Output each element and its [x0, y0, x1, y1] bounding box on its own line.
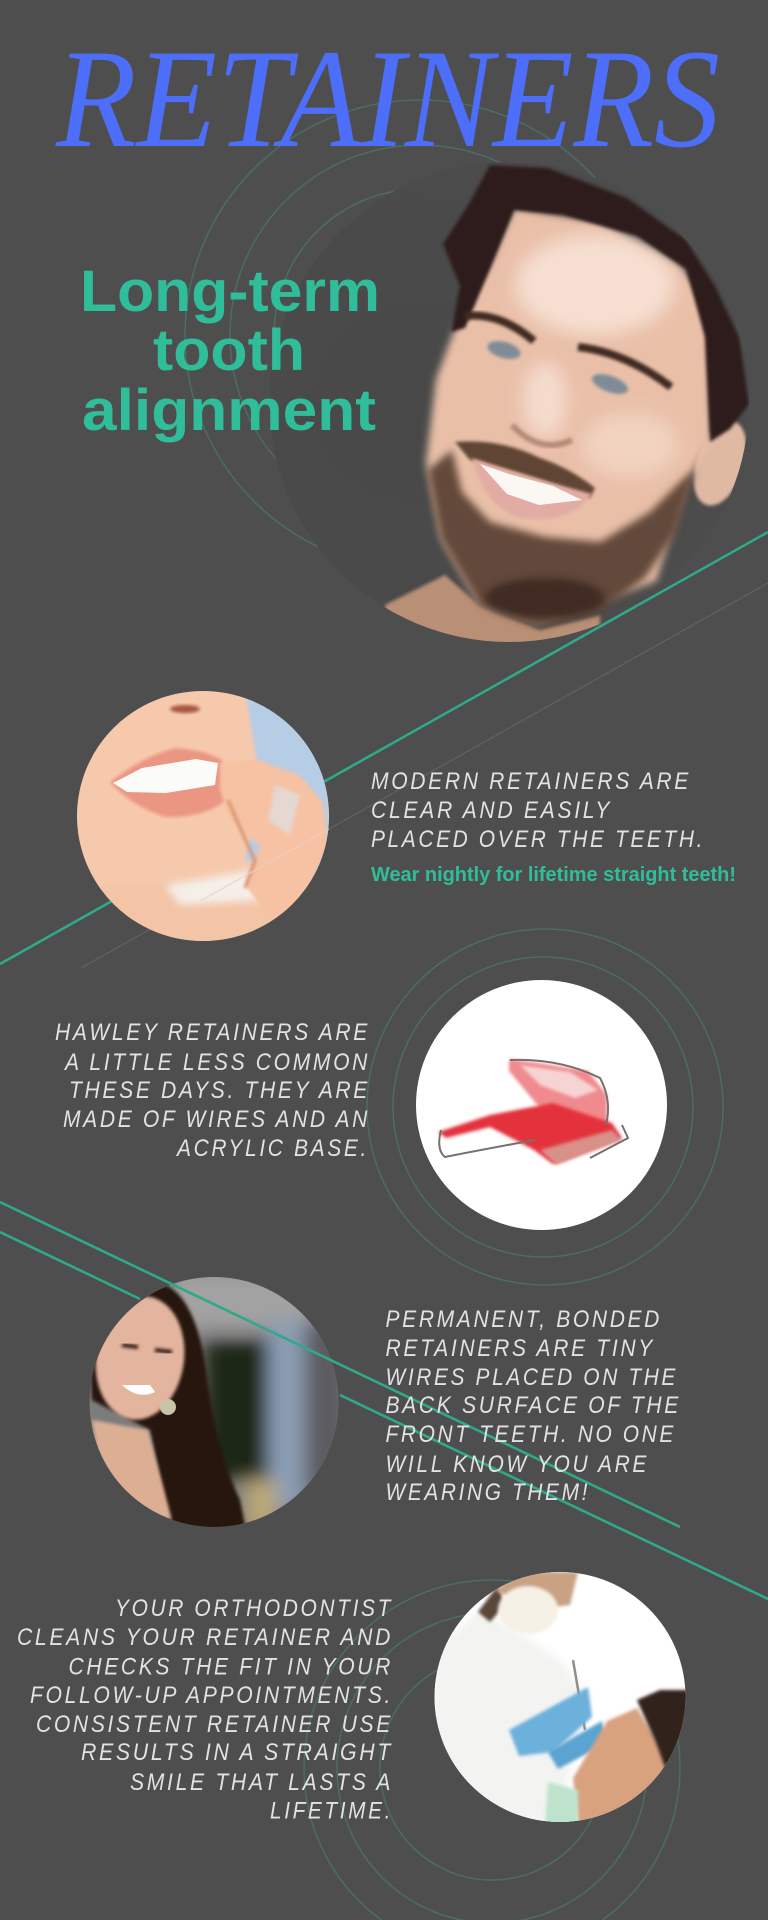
title: RETAINERS: [55, 21, 720, 177]
heading: long-term tooth alignment: tooth: [153, 318, 305, 383]
doctor head: [495, 1572, 578, 1610]
text: permanent retainers: [386, 1306, 681, 1506]
eyebrows: [465, 316, 534, 341]
hair: [443, 165, 749, 442]
cheek highlight: [582, 413, 678, 477]
text: modern retainers: CLEAR AND EASILY: [371, 797, 612, 824]
text: modern retainers: [371, 768, 736, 886]
neck: [98, 886, 274, 941]
text: your orthodontist: LIFETIME.: [270, 1798, 393, 1824]
wires: [439, 1060, 628, 1158]
nose shadow: [512, 425, 572, 445]
forehead highlight: [515, 235, 675, 335]
photo: smiling woman: [88, 1270, 345, 1530]
chest: [92, 1420, 172, 1520]
eyes: [486, 338, 522, 362]
neck and collar: [383, 574, 602, 642]
green cloth: [545, 1782, 578, 1825]
text: permanent retainers: WIRES PLACED ON THE: [386, 1364, 678, 1391]
text: hawley retainers: ACRYLIC BASE.: [175, 1135, 369, 1162]
text: permanent retainers: WEARING THEM!: [386, 1479, 590, 1506]
ear: [692, 420, 746, 508]
heading: long-term tooth alignment: [80, 259, 380, 443]
diagonal line: lower teal three: [0, 1202, 680, 1527]
palate highlight: [520, 1065, 598, 1098]
instrument: [573, 1660, 585, 1730]
heading: long-term tooth alignment: Long-term: [80, 259, 380, 324]
lip: [472, 458, 592, 519]
lips: [110, 748, 226, 817]
text: permanent retainers: FRONT TEETH. NO ONE: [386, 1421, 676, 1448]
diagonal line: lower teal two: [340, 1395, 768, 1599]
text: hawley retainers: HAWLEY RETAINERS ARE: [55, 1019, 370, 1046]
collar: [165, 868, 268, 905]
red base: [438, 1103, 622, 1164]
doctor coat: [434, 1610, 590, 1822]
moustache: [455, 441, 595, 498]
glove two: [548, 1721, 607, 1769]
teeth: [480, 464, 582, 505]
text: permanent retainers: PERMANENT, BONDED: [386, 1306, 662, 1333]
photo: clear aligner on teeth: [77, 691, 329, 941]
text: your orthodontist: YOUR ORTHODONTIST: [115, 1595, 393, 1622]
concentric rings: top: [185, 100, 655, 570]
photo: hawley retainer: [416, 980, 667, 1230]
text: hawley retainers: [55, 1019, 370, 1162]
blurred background: [170, 1270, 345, 1530]
concentric rings: retainer: [367, 929, 723, 1285]
text: hawley retainers: THESE DAYS. THEY ARE: [69, 1077, 370, 1104]
eyes: [122, 1345, 172, 1352]
diagonal line: upper faint: [81, 583, 768, 968]
text: your orthodontist: FOLLOW-UP APPOINTMENTS.: [30, 1682, 393, 1709]
concentric rings: bottom: [304, 1580, 680, 1920]
text: modern retainers: PLACED OVER THE TEETH.: [371, 826, 705, 853]
sky background: [245, 691, 329, 880]
text: permanent retainers: WILL KNOW YOU ARE: [386, 1451, 649, 1478]
callout: wear nightly: Wear nightly for lifetime straight teeth!: [371, 864, 736, 886]
pink rim: [540, 1130, 622, 1165]
text: your orthodontist: [17, 1595, 393, 1824]
photo: orthodontist with patient: [434, 1572, 690, 1825]
patient skin: [573, 1708, 676, 1825]
smile: [122, 1385, 155, 1395]
heading: long-term tooth alignment: alignment: [82, 378, 376, 443]
stubble beard: [428, 450, 695, 626]
text: hawley retainers: MADE OF WIRES AND AN: [63, 1106, 370, 1133]
doctor hair: [478, 1585, 505, 1622]
nose highlight: [523, 362, 567, 438]
diagonal faint line over photo: [200, 829, 329, 901]
text: permanent retainers: RETAINERS ARE TINY: [386, 1335, 655, 1362]
teeth: [113, 759, 218, 793]
earring: [160, 1399, 176, 1415]
text: your orthodontist: SMILE THAT LASTS A: [130, 1769, 393, 1796]
diagonal line: upper teal: [0, 532, 768, 964]
glove one: [509, 1687, 592, 1756]
upper arch: [509, 1059, 607, 1127]
hair: [90, 1285, 246, 1530]
text: your orthodontist: CHECKS THE FIT IN YOUR: [68, 1654, 393, 1680]
face: [94, 1294, 187, 1422]
gap between fingers: [268, 785, 300, 835]
chin shadow: [485, 578, 605, 618]
patient hair: [637, 1690, 690, 1775]
text: modern retainers: MODERN RETAINERS ARE: [371, 768, 691, 795]
text: your orthodontist: RESULTS IN A STRAIGHT: [81, 1739, 393, 1766]
face: [426, 208, 712, 623]
text: permanent retainers: BACK SURFACE OF THE: [386, 1392, 681, 1419]
nostril: [170, 705, 200, 713]
mask: [498, 1586, 558, 1634]
text: your orthodontist: CONSISTENT RETAINER USE: [36, 1711, 393, 1738]
finger shadow: [228, 800, 255, 888]
text: hawley retainers: A LITTLE LESS COMMON: [63, 1049, 370, 1076]
photo: smiling man: [269, 162, 756, 660]
diagonal line: lower teal one: [0, 1232, 140, 1299]
text: your orthodontist: CLEANS YOUR RETAINER AND: [17, 1624, 393, 1651]
hand: [220, 759, 328, 929]
